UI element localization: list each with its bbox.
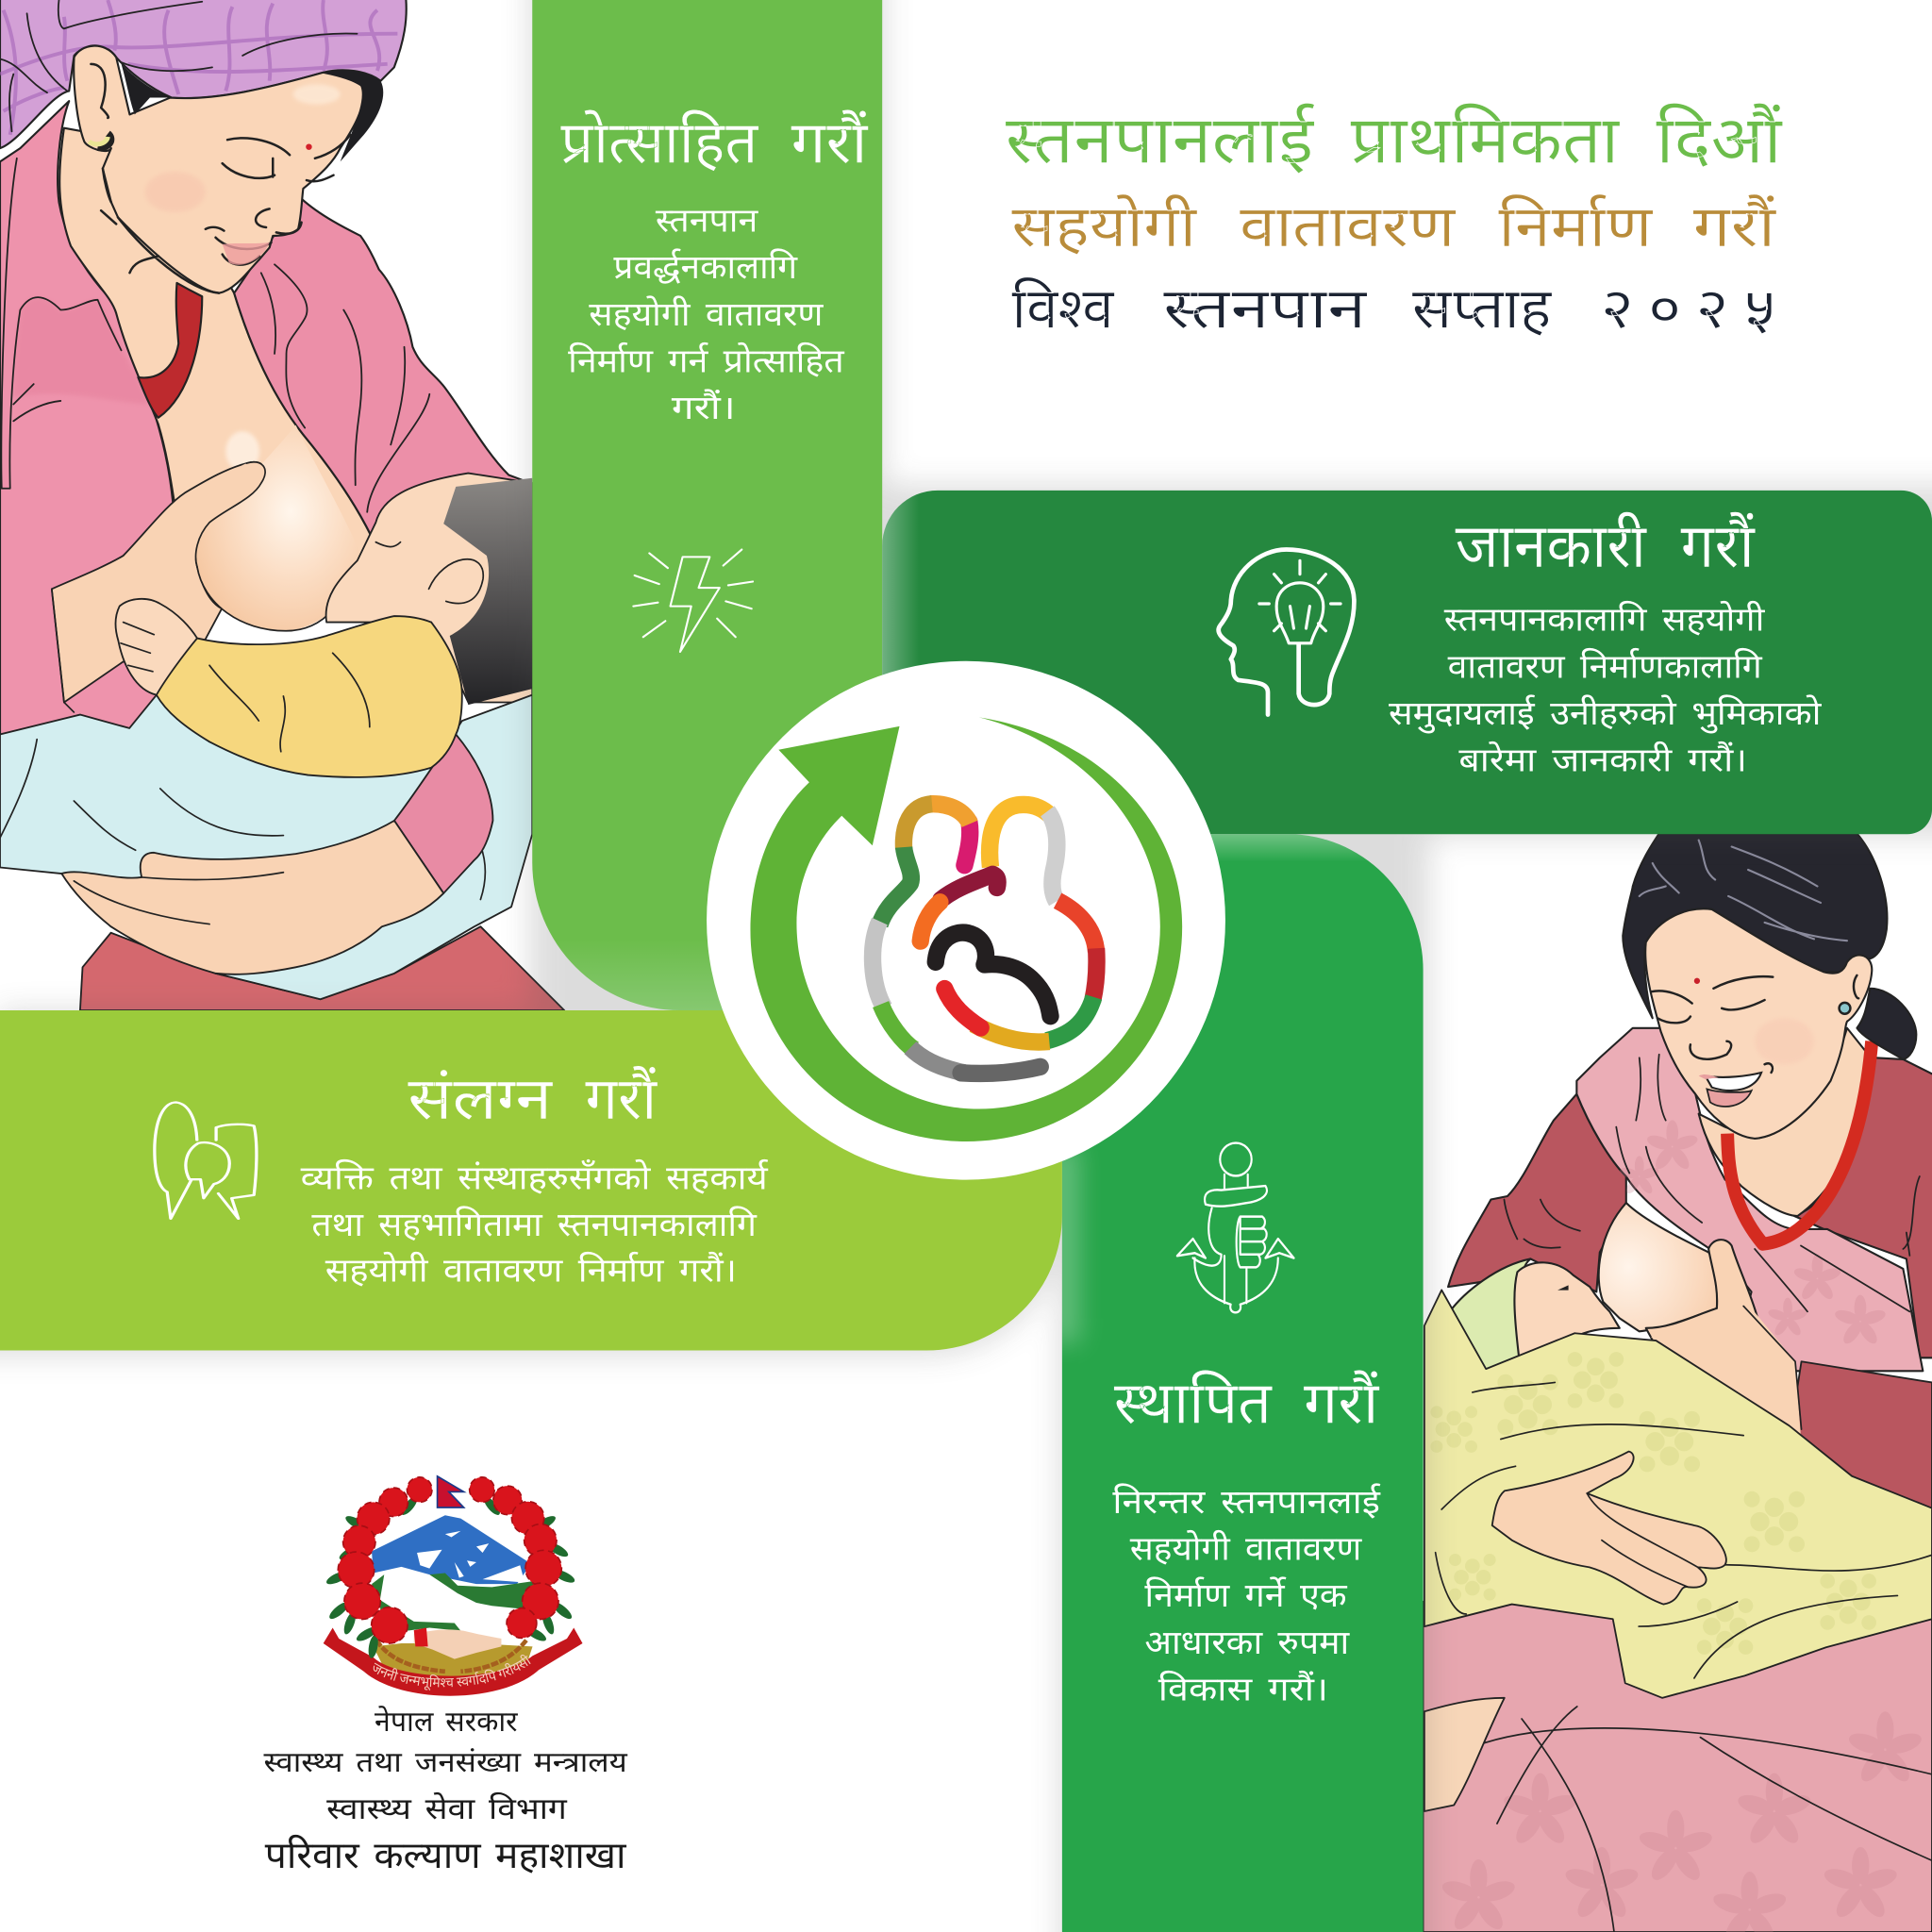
title line 3: सप्ताह bbox=[1412, 276, 1553, 340]
necklace bbox=[138, 283, 202, 418]
facial features bbox=[1651, 975, 1858, 1073]
hills bbox=[429, 1574, 541, 1614]
field and hands bbox=[374, 1643, 533, 1677]
lower skirt bbox=[80, 926, 564, 1010]
blouse right bbox=[234, 199, 536, 600]
text: establish body: निर्माण गर्ने एक bbox=[1144, 1576, 1348, 1614]
text: engage body: सहयोगी वातावरण निर्माण गरौं। bbox=[325, 1251, 737, 1289]
icon: anchor held by fist bbox=[1177, 1143, 1293, 1312]
government text block bbox=[264, 1706, 627, 1876]
text: engage heading: संलग्न bbox=[408, 1066, 553, 1132]
blouse bbox=[1448, 1094, 1626, 1291]
title line 3: २०२५ bbox=[1601, 276, 1790, 340]
sleeve bbox=[394, 734, 492, 893]
blouse left bbox=[0, 101, 175, 741]
flag bbox=[438, 1476, 464, 1507]
title line 2: गरौं bbox=[1693, 194, 1776, 259]
panel: establish (medium green) bbox=[1062, 834, 1424, 1932]
face bbox=[74, 46, 364, 293]
yellow blanket bbox=[1424, 1291, 1932, 1698]
hand on blanket bbox=[1492, 1452, 1726, 1605]
blanket bbox=[0, 695, 532, 999]
panel: promote (bright green) bbox=[532, 0, 882, 1010]
panel: engage (lime) bbox=[0, 1010, 1062, 1351]
hair strips bbox=[122, 64, 383, 161]
government text block: परिवार कल्याण महाशाखा bbox=[265, 1834, 626, 1876]
icon: mother and baby logo bbox=[873, 804, 1097, 1074]
icon: speech bubbles bbox=[155, 1102, 257, 1219]
icon: head with light bulb bbox=[1219, 550, 1354, 715]
text: engage body bbox=[301, 1158, 769, 1289]
illustration: mother breastfeeding, top left bbox=[0, 0, 564, 1010]
bun bbox=[1857, 989, 1916, 1059]
text: promote body: स्तनपान bbox=[656, 203, 759, 240]
text: promote body: सहयोगी वातावरण bbox=[589, 295, 824, 333]
sweater bbox=[157, 616, 462, 777]
facial features bbox=[91, 64, 350, 293]
government text block: स्वास्थ्य सेवा विभाग bbox=[326, 1791, 568, 1825]
text: inform heading: गरौं bbox=[1681, 511, 1756, 581]
title line 2 bbox=[1011, 194, 1776, 259]
title line 1: स्तनपानलाई bbox=[1006, 102, 1315, 177]
title line 3: विश्व bbox=[1011, 276, 1115, 340]
text: inform heading bbox=[1456, 511, 1756, 581]
government text block: स्वास्थ्य तथा जनसंख्या मन्त्रालय bbox=[264, 1747, 627, 1778]
text: establish body: निरन्तर स्तनपानलाई bbox=[1112, 1483, 1381, 1521]
title line 3: स्तनपान bbox=[1163, 276, 1369, 340]
text: promote body bbox=[568, 203, 845, 426]
text: inform body bbox=[1389, 601, 1822, 779]
mountain bbox=[372, 1515, 531, 1584]
national emblem of Nepal bbox=[323, 1475, 583, 1696]
title line 3 bbox=[1011, 276, 1790, 340]
forearm sleeve bbox=[1789, 1361, 1932, 1534]
text: promote heading bbox=[560, 108, 869, 175]
text: establish heading: स्थापित bbox=[1114, 1370, 1273, 1437]
text: establish body: सहयोगी वातावरण bbox=[1130, 1530, 1362, 1568]
baby face bbox=[1514, 1262, 1620, 1371]
text: establish heading: गरौं bbox=[1304, 1370, 1380, 1437]
text: inform body: बारेमा जानकारी गरौं। bbox=[1458, 741, 1747, 779]
central circle logo bbox=[707, 661, 1225, 1180]
title line 1 bbox=[1006, 102, 1784, 177]
baby cap bbox=[1445, 1258, 1530, 1371]
hair bbox=[1623, 834, 1887, 1018]
illustration: mother breastfeeding newborn, bottom right bbox=[1424, 834, 1932, 1932]
icon: lightning bolt bbox=[633, 550, 753, 652]
text: engage body: व्यक्ति तथा संस्थाहरुसँगको सहकार्य bbox=[301, 1158, 769, 1196]
sari drape bbox=[1576, 1028, 1923, 1371]
hand on breast bbox=[1646, 1240, 1765, 1364]
icon: circular arrow bbox=[750, 717, 1182, 1141]
text: establish body bbox=[1112, 1483, 1381, 1707]
text: promote body: गरौं। bbox=[672, 389, 736, 426]
text: establish body: आधारका रुपमा bbox=[1144, 1624, 1350, 1661]
text: promote body: प्रवर्द्धनकालागि bbox=[613, 248, 798, 286]
sari skirt bbox=[1424, 1503, 1932, 1932]
text: establish heading bbox=[1114, 1370, 1380, 1437]
face bbox=[1645, 908, 1872, 1139]
breast highlight and contour bbox=[196, 425, 359, 631]
arm and hand bbox=[52, 462, 265, 702]
text: inform body: समुदायलाई उनीहरुको भुमिकाको bbox=[1389, 694, 1822, 734]
title block bbox=[1006, 102, 1790, 340]
text: inform heading: जानकारी bbox=[1456, 511, 1647, 581]
title line 1: दिऔं bbox=[1656, 102, 1784, 177]
baby hand bbox=[116, 599, 197, 695]
text: promote body: निर्माण गर्न प्रोत्साहित bbox=[568, 341, 845, 379]
baby head bbox=[326, 474, 532, 702]
chest bbox=[59, 128, 397, 600]
title line 2: वातावरण bbox=[1240, 195, 1457, 259]
breast bbox=[1599, 1203, 1719, 1331]
title line 2: सहयोगी bbox=[1011, 194, 1197, 259]
headscarf bbox=[0, 0, 407, 148]
text: promote heading: गरौं bbox=[791, 108, 869, 175]
national emblem of Nepal: जननी जन्मभूमिश्च स्वर्गादपि गरीयसी bbox=[374, 1655, 530, 1690]
panel: inform (dark green) bbox=[882, 491, 1932, 834]
text: inform body: वातावरण निर्माणकालागि bbox=[1448, 647, 1763, 685]
text: engage body: तथा सहभागितामा स्तनपानकालागि bbox=[311, 1206, 758, 1243]
title line 1: प्राथमिकता bbox=[1351, 102, 1621, 177]
knee bbox=[1424, 1698, 1505, 1811]
lower arm and hand bbox=[61, 821, 443, 974]
text: engage heading: गरौं bbox=[585, 1065, 658, 1132]
neck bbox=[1699, 1028, 1874, 1216]
text: establish body: विकास गरौं। bbox=[1158, 1670, 1328, 1707]
text: promote heading: प्रोत्साहित bbox=[560, 108, 759, 175]
government text block: नेपाल सरकार bbox=[375, 1706, 518, 1738]
rhododendron wreath bbox=[325, 1494, 576, 1659]
title line 2: निर्माण bbox=[1498, 194, 1654, 259]
text: engage heading bbox=[408, 1065, 658, 1132]
necklace bbox=[1727, 1041, 1872, 1244]
ribbon bbox=[324, 1627, 583, 1696]
text: inform body: स्तनपानकालागि सहयोगी bbox=[1444, 601, 1765, 639]
